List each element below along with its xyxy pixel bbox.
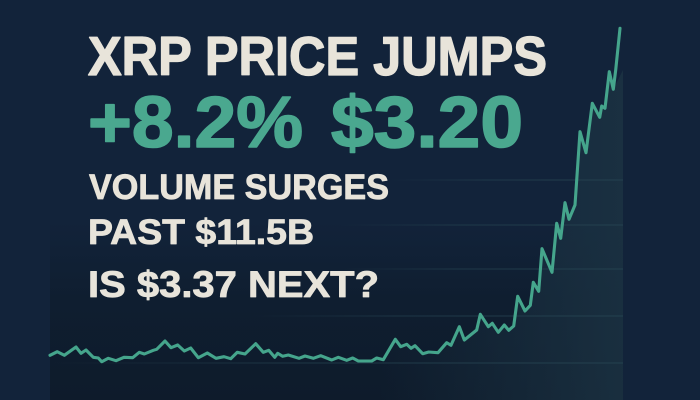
area under price line <box>380 70 623 400</box>
price line <box>50 28 620 362</box>
question: IS $3.37 NEXT? <box>88 264 379 305</box>
grid lines <box>50 180 623 364</box>
subheading: volume line 1: VOLUME SURGES <box>89 167 389 207</box>
stat: percent gain: +8.2% <box>88 83 303 163</box>
title: XRP PRICE JUMPS <box>88 25 547 87</box>
stat: price: $3.20 <box>331 83 523 163</box>
price chart <box>50 28 623 400</box>
subheading: volume line 2: PAST $11.5B <box>88 212 314 252</box>
